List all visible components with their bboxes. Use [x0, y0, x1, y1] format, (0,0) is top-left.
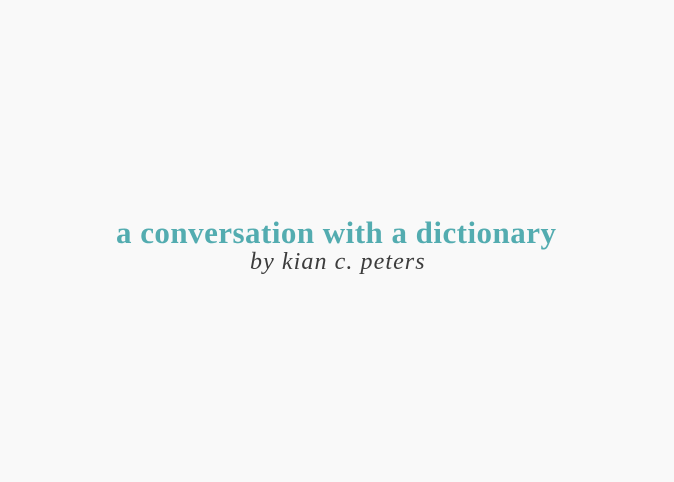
byline: by kian c. peters — [250, 249, 426, 275]
title: a conversation with a dictionary — [116, 215, 556, 250]
